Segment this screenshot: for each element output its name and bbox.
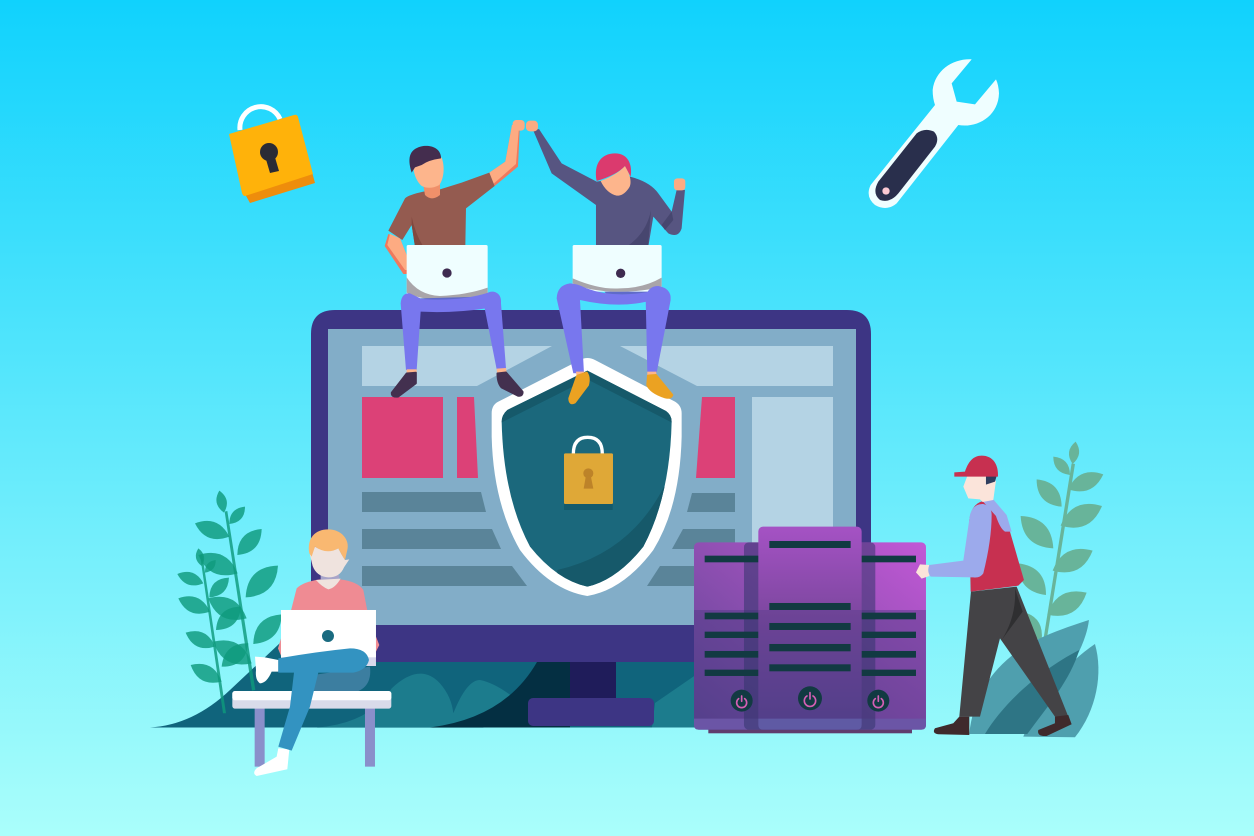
center server slots — [769, 541, 851, 671]
foot: on ground — [254, 748, 289, 776]
screen: pink blocks — [362, 397, 735, 478]
screen: stripes — [362, 492, 735, 586]
shoulder strap — [982, 499, 1012, 532]
arms behind — [278, 637, 379, 657]
icon: yellow padlock — [229, 107, 315, 203]
vest — [969, 501, 1024, 592]
legs — [420, 297, 483, 303]
rear server slots — [705, 556, 916, 676]
hand — [916, 564, 929, 579]
big foreground leaves — [969, 620, 1089, 734]
leaves — [1018, 442, 1103, 657]
cap — [954, 456, 998, 477]
server shadow — [744, 542, 875, 730]
neck — [321, 575, 339, 580]
screen: top panels — [362, 346, 833, 557]
legs — [557, 283, 650, 373]
raised arm — [489, 123, 520, 186]
socks — [576, 372, 585, 377]
laptop — [281, 653, 376, 666]
person: seated on bench with laptop — [232, 529, 391, 776]
icon: wrench — [869, 59, 999, 208]
lower arm — [385, 234, 407, 274]
head — [310, 547, 349, 577]
socks — [407, 369, 417, 373]
laptop — [407, 245, 488, 298]
bench — [232, 691, 391, 767]
power buttons — [731, 686, 889, 712]
face — [601, 166, 631, 196]
rear server units — [694, 542, 926, 730]
monitor — [311, 310, 871, 726]
fists — [526, 121, 538, 131]
hair — [596, 153, 631, 181]
jeans — [278, 648, 369, 751]
shoes — [569, 373, 589, 403]
rear leg — [313, 667, 370, 693]
ground hills — [150, 610, 700, 728]
person: man in brown shirt — [385, 120, 525, 397]
torso — [388, 173, 495, 247]
sweater — [533, 129, 685, 247]
head — [963, 476, 996, 502]
plant: left — [177, 491, 282, 713]
person: technician — [916, 456, 1072, 736]
monitor stand base — [528, 698, 654, 726]
servers — [694, 527, 926, 733]
sleeve — [928, 504, 992, 577]
laptop — [603, 290, 648, 303]
neck and head — [423, 182, 440, 198]
person: woman in slate sweater — [526, 121, 685, 403]
shoes — [392, 373, 416, 397]
torso — [291, 579, 367, 611]
server base — [708, 727, 912, 733]
trousers — [959, 587, 1068, 717]
plant: right — [969, 442, 1103, 737]
shield padlock — [564, 437, 613, 510]
shield — [492, 358, 687, 597]
shoes — [934, 717, 969, 735]
foot: raised — [255, 657, 278, 683]
center server — [758, 527, 862, 730]
